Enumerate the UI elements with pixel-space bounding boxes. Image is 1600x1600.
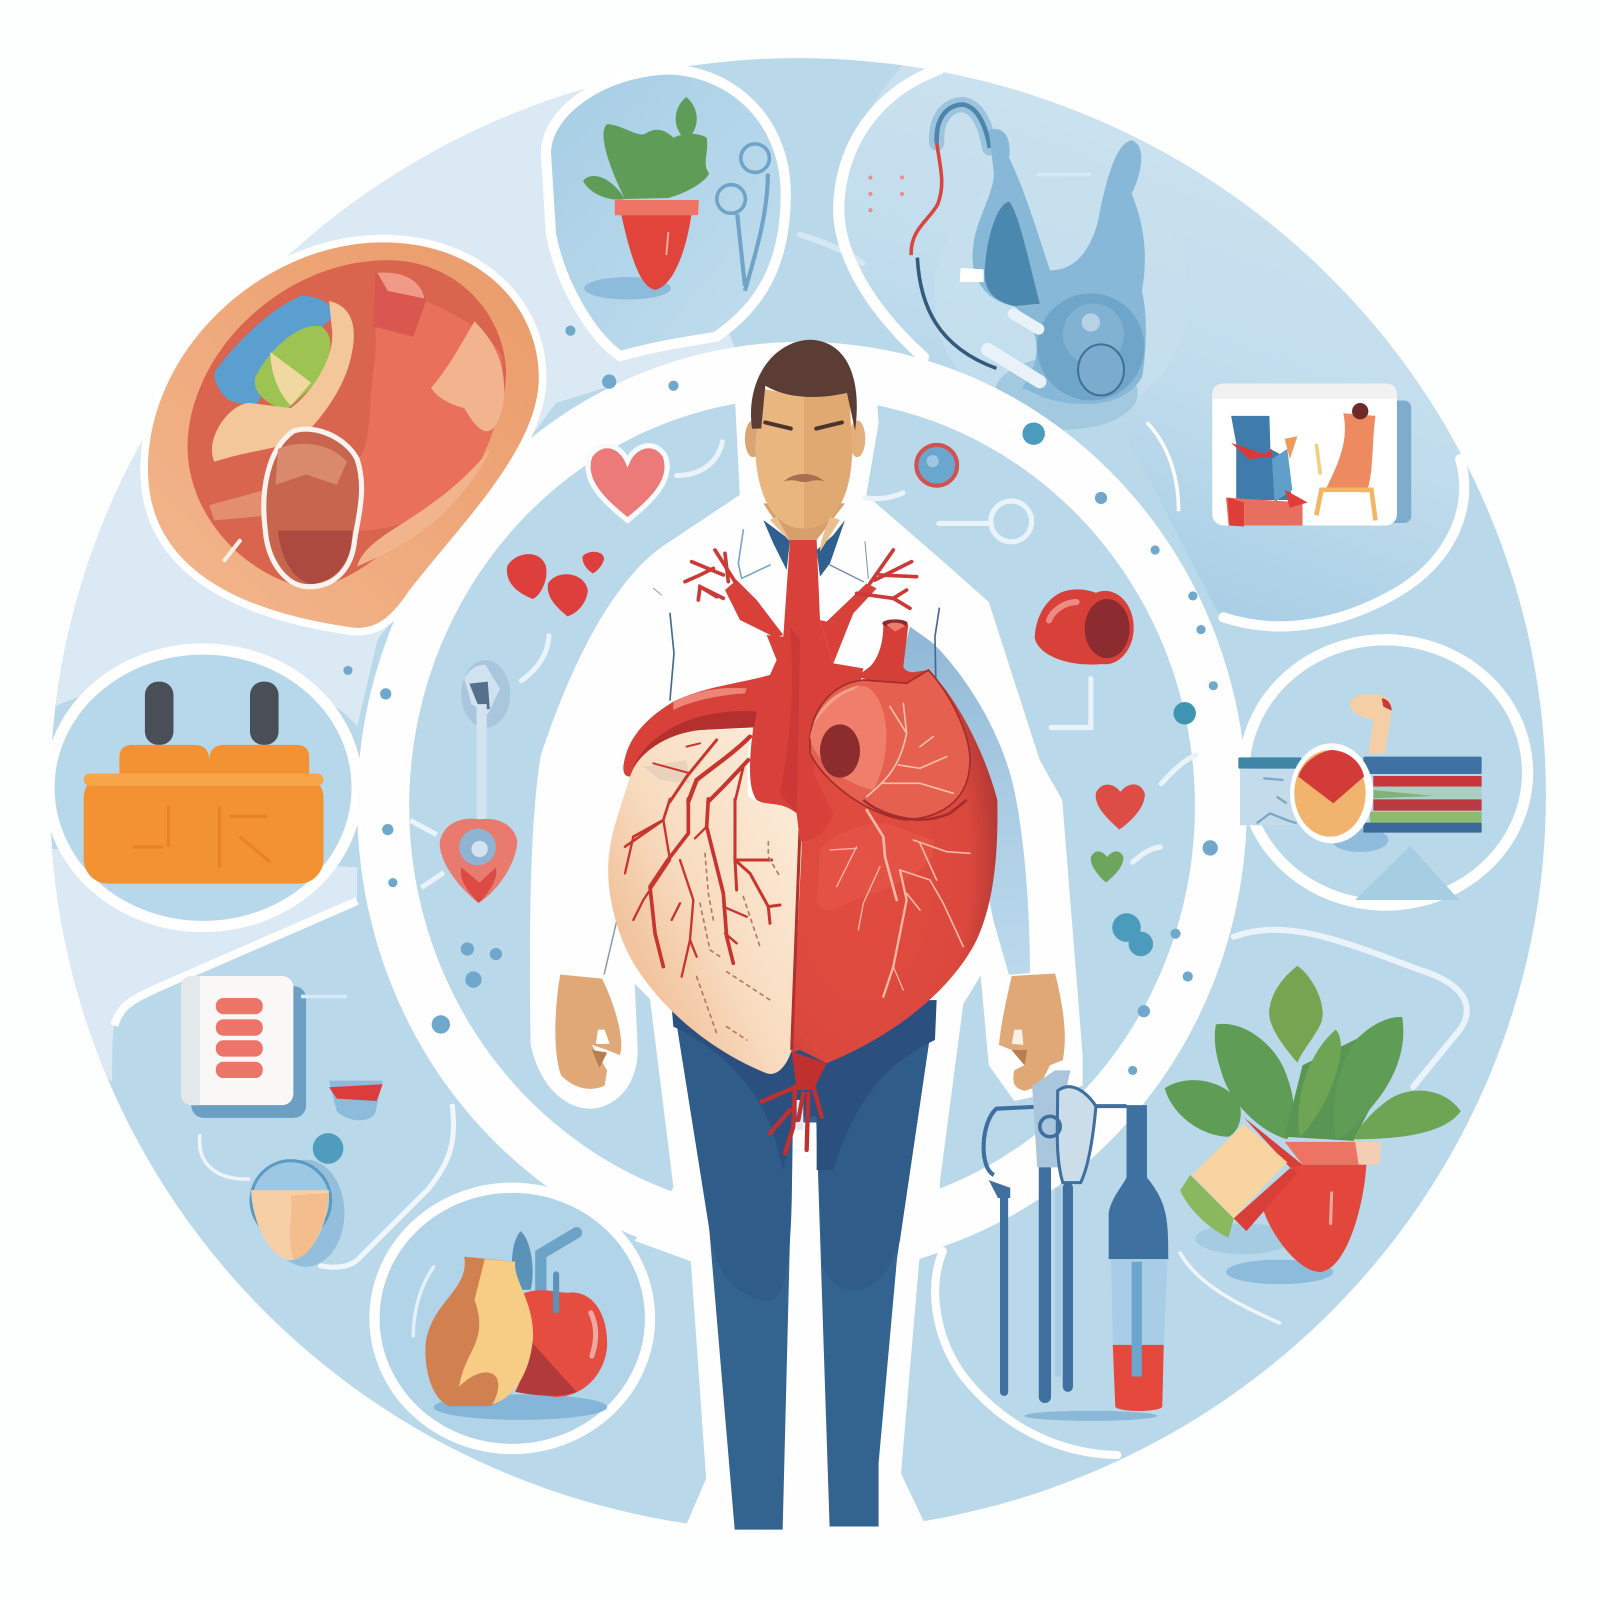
white body silhouette xyxy=(530,393,1083,1536)
lower-left panel outlines xyxy=(114,901,454,1267)
heart upper: vessels and atrium xyxy=(623,540,970,842)
panel: plant blob top xyxy=(546,69,786,356)
icon: pump and droplet xyxy=(410,660,517,903)
blue blob xyxy=(1112,913,1153,956)
left sleeve seam xyxy=(604,918,617,974)
icon: large potted plant xyxy=(1165,966,1461,1323)
icon: small green heart xyxy=(1091,851,1123,883)
left hand xyxy=(555,974,621,1089)
icon: vase and apple xyxy=(413,1231,607,1420)
icon: small cup xyxy=(200,1081,383,1179)
icon: small lens xyxy=(916,445,957,486)
light lower-left wedge xyxy=(52,849,358,1082)
panel content: stacked stripes with round badge xyxy=(1238,694,1482,852)
panel: right circle outline xyxy=(1244,640,1528,905)
main heart xyxy=(608,540,997,1153)
panel: orange case circle xyxy=(49,649,357,927)
panel: fruit circle xyxy=(374,1188,650,1449)
legs xyxy=(672,1000,937,1530)
light upper-left wedge xyxy=(56,89,734,726)
man figure xyxy=(555,340,1065,1530)
sleeve and shoulder shading xyxy=(653,530,1030,975)
panel: lower-right tools outline xyxy=(935,1251,1117,1455)
right hand xyxy=(999,973,1065,1091)
neck and collar xyxy=(763,503,845,577)
icon: photo card xyxy=(1212,384,1411,527)
head xyxy=(745,340,865,529)
icon: potted plant and clamps xyxy=(583,97,769,299)
icon: ring with line xyxy=(991,501,1032,542)
heart lower: veins and roots xyxy=(625,799,970,1153)
orange case icon xyxy=(84,682,323,884)
triangle shading, lower right circle xyxy=(1355,846,1459,900)
panel: stomach illustration xyxy=(148,242,539,628)
decorative dots xyxy=(343,326,1218,1075)
icon: small red heart xyxy=(1096,784,1145,830)
icon: notepad xyxy=(181,976,347,1118)
white ring xyxy=(357,342,1247,1270)
panel: lower-right outline xyxy=(1234,930,1467,1087)
inner curved accents xyxy=(521,442,1196,862)
icon: red berries xyxy=(507,552,604,616)
icon: peach capsule xyxy=(251,1160,344,1267)
heart body: red and cream halves xyxy=(608,670,997,1074)
icon: blue medical device xyxy=(868,105,1179,511)
inner icon: heart with white border xyxy=(588,446,667,520)
icon: red cylinder xyxy=(1035,589,1134,665)
icon: medical tools xyxy=(984,1070,1168,1421)
panel: top-right device panel xyxy=(800,41,1500,626)
